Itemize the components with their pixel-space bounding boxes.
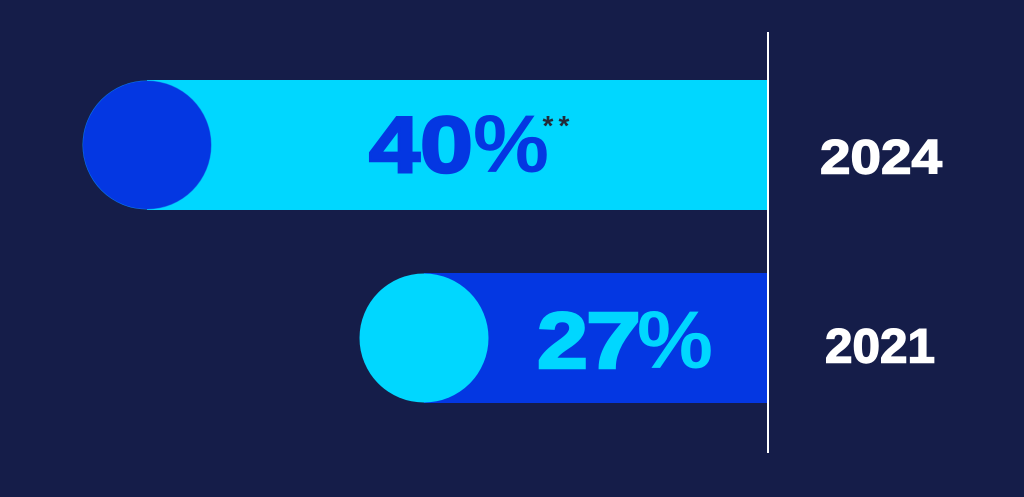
- label: 2024: 2024: [820, 132, 942, 184]
- footnote marker: [542, 110, 570, 141]
- label: 2021: 2021: [825, 320, 935, 374]
- bar: 2024: [82, 80, 767, 210]
- value: 40%: [369, 99, 549, 190]
- value: 40%: %: [473, 99, 549, 190]
- value: 40%: 4: [369, 100, 421, 189]
- value: 27%: [537, 295, 713, 386]
- value: 27%: 7: [586, 296, 641, 385]
- bar: 2021: [360, 273, 767, 403]
- footnote marker: *: [542, 110, 554, 141]
- value: 27%: 2: [537, 296, 588, 385]
- axis line: [767, 32, 769, 453]
- value: 40%: 0: [420, 100, 473, 189]
- value: 27%: %: [637, 295, 713, 386]
- footnote marker: *: [558, 110, 570, 141]
